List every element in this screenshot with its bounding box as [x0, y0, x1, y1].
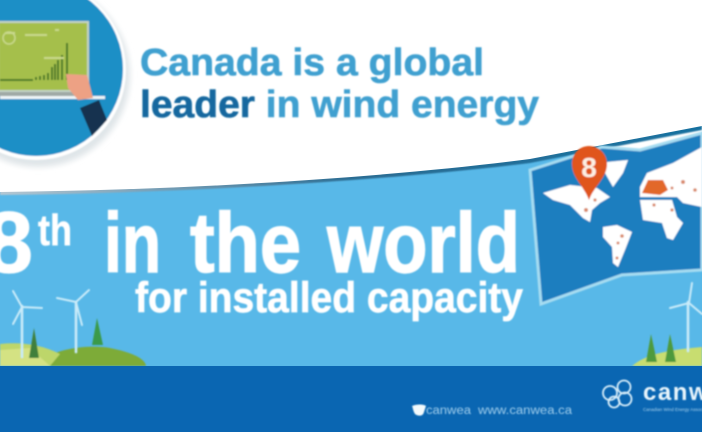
heading line 1: Canada is a global	[140, 42, 484, 84]
hill pale	[0, 348, 50, 366]
map panel	[530, 133, 702, 304]
word world: world	[326, 196, 520, 290]
Africa	[640, 200, 683, 240]
footer bar	[0, 366, 702, 432]
arm sleeve	[80, 100, 107, 136]
footer contact	[412, 404, 573, 417]
Eurasia	[640, 147, 702, 207]
North America	[543, 185, 610, 222]
sky background panel	[0, 150, 702, 370]
white header band	[0, 0, 702, 195]
wind turbine right	[670, 283, 702, 351]
pin number: 8	[581, 152, 597, 183]
left hills and trees	[0, 318, 146, 366]
chart bars	[0, 43, 67, 80]
logo	[603, 379, 702, 412]
subheading: for installed capacity	[135, 274, 523, 322]
icon: laptop with growth chart in circle	[0, 0, 130, 167]
rank suffix th: th	[38, 206, 72, 255]
heading line 2: leader in wind energy	[140, 84, 539, 126]
tree two	[665, 334, 676, 362]
word in: in	[104, 196, 161, 290]
wind turbine left	[13, 291, 42, 357]
tree right	[92, 318, 103, 345]
laptop screen	[0, 22, 88, 91]
hand	[66, 74, 93, 100]
South America	[603, 225, 632, 267]
twitter handle: canwea	[426, 405, 472, 417]
right hill and trees	[632, 334, 702, 366]
capacity dots	[584, 180, 697, 260]
white circle ring	[0, 0, 126, 160]
main headline	[0, 195, 523, 322]
heading	[140, 42, 539, 126]
laptop base	[0, 92, 88, 96]
icon: location pin 8	[572, 146, 607, 200]
hill right	[632, 347, 702, 366]
icon: logo flower	[603, 380, 632, 408]
wind turbine centre	[57, 290, 89, 352]
website: www.canwea.ca	[477, 405, 573, 417]
tree left	[29, 328, 39, 358]
hill dark green	[35, 347, 146, 366]
hill light green	[0, 343, 60, 366]
word the: the	[190, 196, 301, 290]
blue circle	[0, 0, 123, 156]
circle shadow	[0, 0, 130, 167]
tree one	[646, 334, 657, 362]
in the world	[104, 196, 520, 290]
icon: twitter bird	[412, 404, 426, 416]
Europe highlight	[642, 180, 668, 195]
Greenland	[605, 160, 628, 187]
